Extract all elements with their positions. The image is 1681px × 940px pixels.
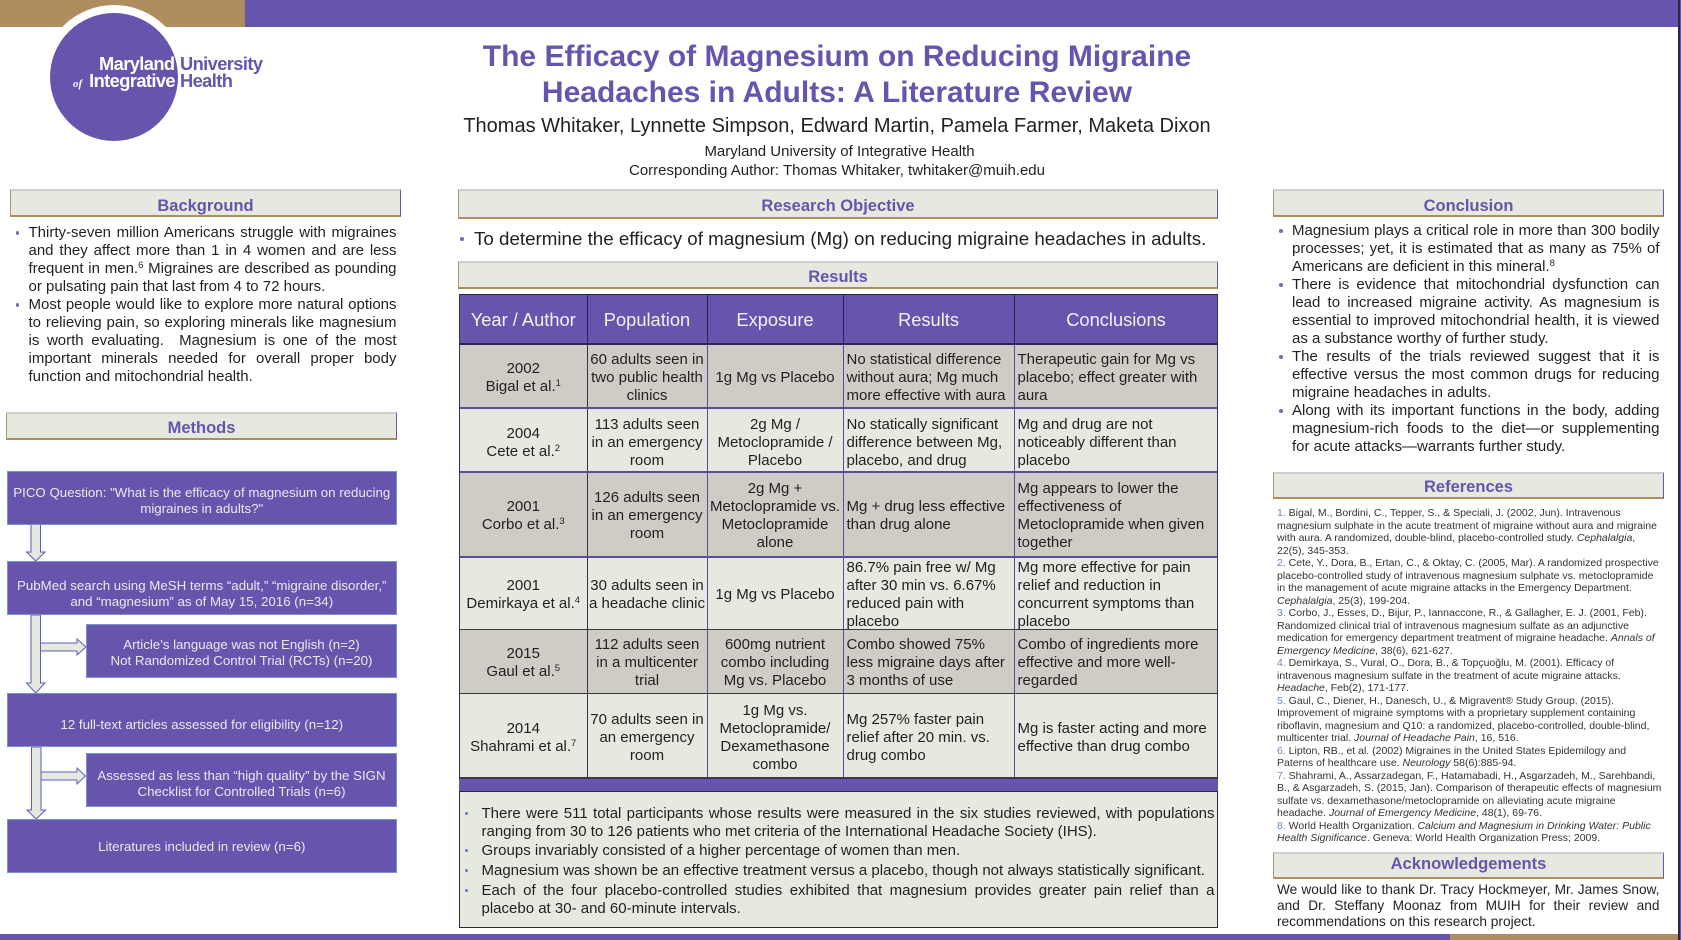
conclusion text: There is evidence that mitochondrial dysfunction can — [1292, 276, 1660, 293]
background text: function and mitochondrial health. — [28, 368, 253, 385]
row: Cete 2004: 2004 — [507, 424, 540, 442]
background text: and they affect more than 1 in 4 women and are less — [28, 242, 396, 259]
flow box: PubMed search: and “magnesium” as of May 15, 2016 (n=34) — [70, 594, 333, 609]
flow box: PubMed search: PubMed search using MeSH terms “adult,” “migraine disorder,” — [17, 578, 386, 593]
row: Gaul 2015: 2015 — [507, 645, 540, 662]
row: Gaul 2015: 600mg nutrient — [725, 636, 825, 653]
row: Cete 2004: 2g Mg / — [750, 416, 800, 432]
affiliation and corresponding author: Corresponding Author: Thomas Whitaker, twhitaker@muih.edu — [629, 162, 1045, 179]
flow box: PubMed search — [6, 561, 397, 615]
acknowledgements text: recommendations on this research project. — [1277, 914, 1536, 929]
references list: 4. Demirkaya, S., Vural, O., Dora, B., & Topçuoğlu, M. (2001). Efficacy of — [1277, 657, 1614, 669]
row: Shahrami 2014: 1g Mg vs. — [742, 702, 808, 719]
title — [483, 40, 1191, 108]
row: Gaul 2015: Gaul et al.5 — [486, 663, 560, 680]
references list: intravenous magnesium sulfate in the treatment of acute migraine attacks. — [1277, 670, 1621, 682]
results table — [459, 294, 1218, 778]
conclusion text: The results of the trials reviewed suggest that it is — [1292, 348, 1660, 365]
row: Cete 2004: placebo, and drug — [846, 452, 967, 468]
background text — [16, 224, 396, 385]
conclusion text: Magnesium plays a critical role in more than 300 bodily — [1292, 222, 1660, 239]
references list: Headache, Feb(2), 171-177. — [1277, 682, 1409, 694]
row: Demirkaya 2001: reduced pain with — [846, 595, 964, 612]
conclusion text: as a substance worthy of further study. — [1292, 330, 1549, 347]
results summary bullets: ranging from 30 to 126 patients who met criteria of the International Headache Society (IHS). — [482, 822, 1097, 840]
background text: to relieving pain, so exploring minerals like magnesium — [28, 314, 396, 331]
row: Shahrami 2014: Mg is faster acting and more — [1018, 720, 1207, 737]
heading: results — [458, 261, 1218, 289]
conclusion text: Americans are deficient in this mineral.8 — [1292, 258, 1555, 275]
panel: background — [10, 189, 401, 385]
panel: acknowledgements — [1273, 852, 1664, 929]
row: Bigal 2002: No statistical difference — [846, 350, 1001, 368]
row: Demirkaya 2001: 86.7% pain free w/ Mg — [846, 559, 996, 576]
heading: research objective — [458, 189, 1218, 219]
right edge line — [1678, 0, 1681, 940]
row: Shahrami 2014: drug combo — [846, 747, 926, 764]
results summary bullets — [465, 804, 1214, 917]
references list: riboflavin, magnesium and Q10: a randomized, placebo-controlled, double-blind, — [1277, 720, 1649, 732]
row: Demirkaya 2001: 30 adults seen in — [590, 577, 704, 594]
row: Cete 2004: room — [630, 452, 664, 468]
flow box: literatures included — [6, 819, 397, 873]
panel: methods — [6, 412, 397, 873]
row: Bigal 2002: Therapeutic gain for Mg vs — [1018, 350, 1195, 368]
row: Bigal 2002: 60 adults seen in — [590, 350, 704, 368]
references list: 5. Gaul, C., Diener, H., Danesch, U., & Migravent® Study Group. (2015). — [1277, 694, 1614, 706]
bottom bar — [0, 934, 1678, 940]
row: Gaul 2015: in a multicenter — [596, 654, 698, 671]
row: Corbo 2001: Corbo et al.3 — [482, 516, 565, 533]
row: Demirkaya 2001: a headache clinic — [589, 595, 705, 612]
row: Cete 2004: No statically significant — [846, 416, 998, 432]
conclusion text — [1279, 222, 1660, 455]
row: Gaul 2015: 112 adults seen — [595, 636, 699, 653]
row: Demirkaya 2001: 1g Mg vs Placebo — [715, 586, 835, 603]
acknowledgements text: and Dr. Steffany Moonaz from MUIH for their review and — [1277, 898, 1660, 913]
flow box: exclusions language and RCT — [86, 624, 397, 678]
references list: B., & Asgarzadeh, S. (2015, Jan). Comparison of therapeutic effects of magnesium — [1277, 782, 1661, 794]
title: The Efficacy of Magnesium on Reducing Migraine — [483, 40, 1191, 73]
row: Corbo 2001: Metoclopramide vs. — [710, 498, 840, 515]
authors: Thomas Whitaker, Lynnette Simpson, Edward Martin, Pamela Farmer, Maketa Dixon — [463, 115, 1211, 137]
row: Demirkaya 2001: 2001 — [507, 577, 540, 594]
row: Cete 2004: Cete et al.2 — [486, 442, 560, 460]
references list: Emergency Medicine, 38(6), 621-627. — [1277, 644, 1453, 656]
references list: 3. Corbo, J., Esses, D., Bijur, P., Iannaccone, R., & Gallagher, E. J. (2001, Feb). — [1277, 607, 1647, 619]
row: Cete 2004: difference between Mg, — [846, 434, 1002, 450]
row: Cete 2004: Metoclopramide / — [717, 434, 833, 450]
heading: results: Results — [808, 268, 868, 286]
row: Corbo 2001 — [459, 473, 1218, 558]
row: Shahrami 2014: Shahrami et al.7 — [470, 738, 576, 755]
row: Bigal 2002: placebo; effect greater with — [1018, 368, 1197, 386]
row: Shahrami 2014: Dexamethasone — [720, 738, 830, 755]
row: Gaul 2015: trial — [635, 672, 659, 689]
row: Demirkaya 2001: placebo — [1018, 613, 1070, 630]
references list: with aura. A randomized, double-blind, placebo-controlled study. Cephalalgia, — [1277, 532, 1635, 544]
conclusion text: migraine headaches in adults. — [1292, 384, 1491, 401]
flow box: PICO question: migraines in adults?" — [140, 501, 263, 516]
row: Shahrami 2014: relief after 20 min. vs. — [846, 729, 990, 746]
references list: medication for emergency department treatment of migraine headache. Annals of — [1277, 632, 1655, 644]
row: Gaul 2015: 3 months of use — [846, 672, 953, 689]
row: Demirkaya 2001: relief and reduction in — [1018, 577, 1161, 594]
references list: headache. Journal of Emergency Medicine, 48(1), 69-76. — [1277, 807, 1542, 819]
row: Gaul 2015: effective and more well- — [1018, 654, 1176, 671]
background text: important minerals needed for overall proper body — [28, 350, 396, 367]
flow box: exclusions language and RCT: Not Randomized Control Trial (RCTs) (n=20) — [111, 653, 372, 668]
row: Shahrami 2014: combo — [752, 756, 798, 773]
row: Corbo 2001: Metoclopramide — [722, 516, 828, 533]
row: Cete 2004: Placebo — [748, 452, 802, 468]
row: Bigal 2002: more effective with aura — [846, 386, 1005, 404]
row: Corbo 2001: together — [1018, 534, 1073, 551]
row: Shahrami 2014: effective than drug combo — [1018, 738, 1190, 755]
heading: background: Background — [157, 197, 254, 215]
references list: 7. Shahrami, A., Assarzadegan, F., Hatamabadi, H., Asgarzadeh, M., Sarehbandi, — [1277, 770, 1655, 782]
results summary bullets: Groups invariably consisted of a higher percentage of women than men. — [482, 842, 960, 859]
flow box: literatures included: Literatures included in review (n=6) — [98, 839, 305, 854]
logo: Maryland University of Integrative Health: of — [73, 78, 84, 90]
acknowledgements text — [1277, 882, 1660, 929]
row: Gaul 2015: regarded — [1018, 672, 1078, 689]
flow box: SIGN checklist exclusions — [86, 753, 397, 807]
row: Corbo 2001: 2g Mg + — [748, 480, 802, 497]
row: Cete 2004: 113 adults seen — [595, 416, 699, 432]
background text: or pulsating pain that last from 4 to 72 hours. — [28, 278, 325, 295]
row: Cete 2004: noticeably different than — [1018, 434, 1177, 450]
row: Demirkaya 2001: placebo — [846, 613, 899, 630]
table header row: Conclusions — [1066, 308, 1166, 330]
row: Demirkaya 2001 — [459, 558, 1218, 630]
references list: 22(5), 345-353. — [1277, 544, 1349, 556]
flow box: exclusions language and RCT: Article's language was not English (n=2) — [123, 637, 360, 652]
top bar — [0, 0, 1678, 27]
conclusion text: effective versus the most common drugs for reducing — [1292, 366, 1660, 383]
heading: conclusion: Conclusion — [1424, 197, 1513, 215]
flow box: PICO question: PICO Question: "What is the efficacy of magnesium on reducing — [13, 485, 390, 500]
table header row: Exposure — [736, 308, 814, 330]
row: Shahrami 2014: 70 adults seen in — [590, 711, 704, 728]
row: Cete 2004: Mg and drug are not — [1018, 416, 1153, 432]
row: Corbo 2001: Mg + drug less effective — [846, 498, 1005, 515]
conclusion text: for acute attacks—warrants further study. — [1292, 438, 1565, 455]
row: Demirkaya 2001: concurrent symptoms than — [1018, 595, 1194, 612]
row: Bigal 2002: clinics — [627, 386, 667, 404]
panel: conclusion — [1273, 189, 1664, 455]
references list: magnesium sulphate in the acute treatment of migraine without aura and migraine — [1277, 520, 1657, 532]
background text: is worth evaluating. Magnesium is one of the most — [28, 332, 396, 349]
panel: research objective — [458, 189, 1218, 249]
flow arrows — [25, 525, 86, 819]
heading: acknowledgements — [1273, 852, 1664, 879]
table header row: Year / Author — [471, 308, 576, 330]
conclusion text: processes; yet, it is estimated that as many as 75% of — [1292, 240, 1660, 257]
affiliation and corresponding author — [629, 143, 1045, 179]
table header row: Results — [898, 308, 959, 330]
row: Shahrami 2014: room — [630, 747, 664, 764]
row: Demirkaya 2001: after 30 min vs. 6.67% — [846, 577, 996, 594]
row: Corbo 2001: alone — [757, 534, 793, 551]
row: Bigal 2002: aura — [1018, 386, 1048, 404]
logo: Maryland University of Integrative Health: University — [180, 53, 264, 74]
row: Demirkaya 2001: Mg more effective for pain — [1018, 559, 1191, 576]
results summary bullets: There were 511 total participants whose results were measured in the six studies reviewed, with populations — [482, 804, 1214, 822]
row: Bigal 2002: Bigal et al.1 — [486, 378, 561, 394]
panel: results summary — [459, 791, 1218, 928]
table header row — [459, 294, 1218, 345]
background text: Thirty-seven million Americans struggle with migraines — [28, 224, 396, 241]
row: Bigal 2002: 2002 — [507, 360, 540, 376]
logo: Maryland University of Integrative Health: Health — [180, 70, 233, 91]
logo: Maryland University of Integrative Health: Maryland — [99, 53, 174, 74]
background text: Most people would like to explore more natural options — [28, 296, 396, 313]
conclusion text: essential to improved mitochondrial health, it is viewed — [1292, 312, 1660, 329]
references list: Randomized clinical trial of intravenous magnesium sulfate as an adjunctive — [1277, 620, 1629, 632]
flow box: full-text articles: 12 full-text articles assessed for eligibility (n=12) — [60, 717, 343, 732]
row: Gaul 2015: Combo showed 75% — [846, 636, 985, 653]
row: Demirkaya 2001: Demirkaya et al.4 — [466, 595, 580, 612]
references list: multicenter trial. Journal of Headache Pain, 16, 516. — [1277, 732, 1519, 744]
row: Bigal 2002: without aura; Mg much — [846, 368, 998, 386]
references list: 2. Cete, Y., Dora, B., Ertan, C., & Oktay, C. (2005, Mar). A randomized prospective — [1277, 557, 1659, 569]
references list: sulfate vs. dexamethasone/metoclopramide on alleviating acute migraine — [1277, 794, 1616, 806]
row: Corbo 2001: Mg appears to lower the — [1018, 480, 1178, 497]
row: Bigal 2002: 1g Mg vs Placebo — [715, 368, 835, 386]
references list: Cephalalgia, 25(3), 199-204. — [1277, 594, 1410, 606]
references list: in the management of acute migraine attacks in the Emergency Department. — [1277, 582, 1632, 594]
row: Gaul 2015: combo including — [721, 654, 829, 671]
references list: 6. Lipton, RB., et al. (2002) Migraines in the United States Epidemilogy and — [1277, 744, 1626, 756]
flow box: full-text articles — [6, 693, 397, 747]
row: Shahrami 2014: 2014 — [507, 720, 540, 737]
background text: frequent in men.6 Migraines are described as pounding — [28, 260, 396, 277]
conclusion text: magnesium-rich foods to the diet—or supplementing — [1292, 420, 1660, 437]
heading: references: References — [1424, 478, 1513, 496]
flow box: SIGN checklist exclusions: Assessed as less than “high quality” by the SIGN — [97, 768, 386, 783]
heading: acknowledgements: Acknowledgements — [1391, 854, 1546, 873]
row: Gaul 2015 — [459, 630, 1218, 694]
row: Corbo 2001: 2001 — [507, 498, 540, 515]
flow box: PICO question — [6, 471, 397, 525]
results summary bullets: placebo at 30- and 60-minute intervals. — [482, 900, 741, 917]
objective text: To determine the efficacy of magnesium (Mg) on reducing migraine headaches in adults. — [474, 228, 1206, 249]
table footer band — [459, 778, 1218, 792]
heading: background — [10, 189, 401, 217]
affiliation and corresponding author: Maryland University of Integrative Health — [704, 143, 975, 160]
row: Shahrami 2014: an emergency — [599, 729, 695, 746]
row: Corbo 2001: in an emergency — [592, 507, 702, 524]
logo: Maryland University of Integrative Health: Integrative — [89, 70, 175, 91]
row: Bigal 2002: two public health — [591, 368, 703, 386]
row: Cete 2004: placebo — [1018, 452, 1070, 468]
row: Corbo 2001: than drug alone — [846, 516, 951, 533]
references list — [1277, 507, 1661, 844]
row: Cete 2004 — [459, 409, 1218, 473]
row: Corbo 2001: effectiveness of — [1018, 498, 1121, 515]
references list: 1. Bigal, M., Bordini, C., Tepper, S., & Speciali, J. (2002, Jun). Intravenous — [1277, 507, 1621, 519]
results summary bullets: Each of the four placebo-controlled studies exhibited that magnesium provides greater pain relief than a — [482, 882, 1214, 899]
row: Shahrami 2014 — [459, 694, 1218, 778]
table header row: Population — [604, 308, 690, 330]
row: Corbo 2001: 126 adults seen — [594, 489, 700, 506]
acknowledgements text: We would like to thank Dr. Tracy Hockmeyer, Mr. James Snow, — [1277, 882, 1660, 897]
references list: 8. World Health Organization. Calcium and Magnesium in Drinking Water: Public — [1277, 820, 1651, 832]
logo: Maryland University of Integrative Health — [50, 5, 264, 141]
title: Headaches in Adults: A Literature Review — [542, 76, 1132, 108]
references list: Health Significance. Geneva: World Health Organization Press; 2009. — [1277, 832, 1600, 844]
results summary bullets: Magnesium was shown be an effective treatment versus a placebo, though not always statistically significant. — [482, 862, 1205, 879]
references list: Improvement of migraine symptoms with a proprietary supplement containing — [1277, 707, 1635, 719]
flow box: SIGN checklist exclusions: Checklist for Controlled Trials (n=6) — [137, 784, 346, 799]
heading: methods: Methods — [168, 419, 235, 437]
heading: references — [1273, 472, 1664, 499]
heading: research objective: Research Objective — [761, 197, 915, 215]
heading: conclusion — [1273, 189, 1664, 217]
row: Gaul 2015: Combo of ingredients more — [1018, 636, 1198, 653]
references list: placebo-controlled study of intravenous magnesium sulphate vs. metoclopramide — [1277, 570, 1653, 582]
row: Shahrami 2014: Metoclopramide/ — [720, 720, 830, 737]
row: Corbo 2001: room — [630, 525, 664, 542]
conclusion text: Along with its important functions in the body, adding — [1292, 402, 1660, 419]
row: Shahrami 2014: Mg 257% faster pain — [846, 711, 984, 728]
row: Cete 2004: in an emergency — [592, 434, 702, 450]
row: Corbo 2001: Metoclopramide when given — [1018, 516, 1204, 533]
row: Gaul 2015: Mg vs. Placebo — [724, 672, 826, 689]
heading: methods — [6, 412, 397, 440]
conclusion text: lead to increased migraine activity. As magnesium is — [1292, 294, 1660, 311]
references list: Paterns of healthcare use. Neurology 58(6):885-94. — [1277, 757, 1516, 769]
row: Bigal 2002 — [459, 345, 1218, 409]
row: Gaul 2015: less migraine days after — [846, 654, 1005, 671]
